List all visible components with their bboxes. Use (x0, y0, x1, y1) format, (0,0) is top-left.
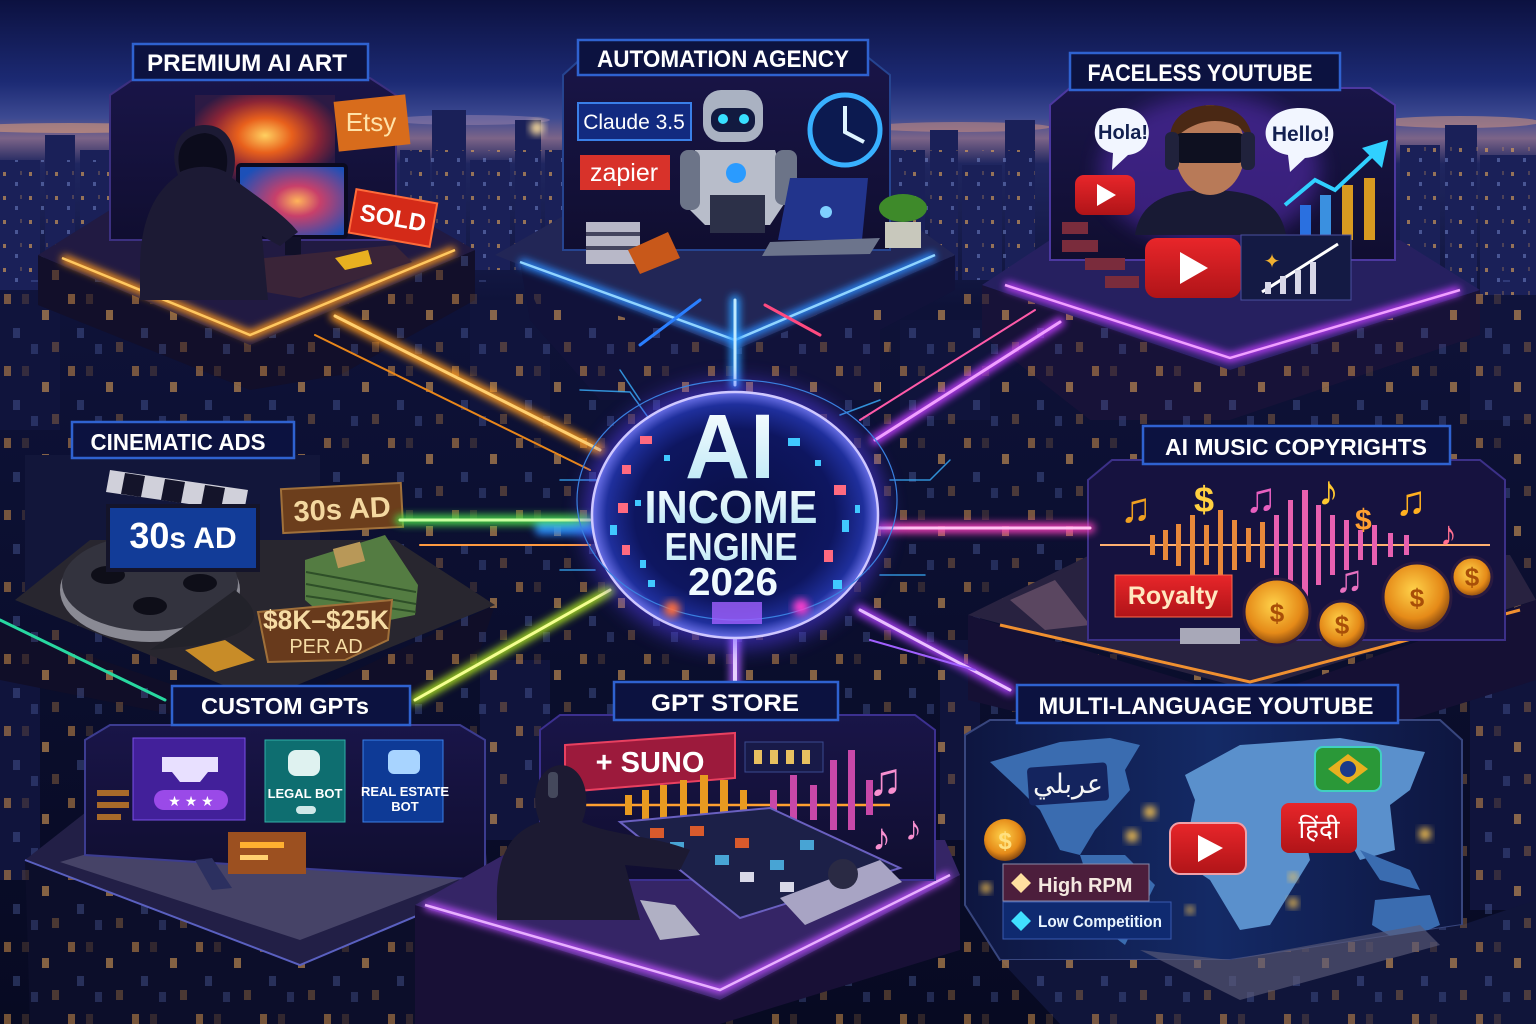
icon: money stacks (305, 535, 418, 630)
icon: music notes and dollar signs: ♪ (1440, 515, 1457, 553)
tag: Claude 3.5 (578, 103, 691, 140)
tag: High RPM: High RPM (1038, 875, 1132, 897)
speech bubble: Hello! (1266, 108, 1333, 172)
central sphere: AI Income Engine 2026: AI (685, 396, 775, 498)
icon: laptop (762, 178, 880, 256)
icon: tablet (195, 858, 232, 890)
speech bubble: Hola! (1095, 108, 1149, 170)
heading: CINEMATIC ADS (90, 429, 266, 455)
tag: 30s AD: 30s AD (293, 491, 392, 529)
tag: $8K-$25K per ad: $8K–$25K (263, 605, 389, 635)
tag: SOLD: SOLD (358, 199, 428, 238)
waveform (560, 750, 890, 830)
stats card (1241, 235, 1351, 300)
heading: PREMIUM AI ART (147, 50, 347, 77)
panel: Multi-Language YouTube (965, 685, 1536, 1024)
card: Real Estate Bot (361, 740, 449, 822)
speech bubble: Hola!: Hola! (1098, 122, 1148, 144)
tag: Royalty: Royalty (1128, 582, 1218, 610)
panel: Automation Agency (495, 40, 955, 400)
tag: 30s AD (281, 483, 403, 533)
tag: Etsy: Etsy (346, 107, 396, 137)
icon: Brazil flag (1315, 747, 1381, 791)
back wall (1050, 88, 1395, 260)
monitor (238, 165, 346, 255)
icon: music notes: ♫ (868, 753, 902, 805)
tag: Low Competition: Low Competition (1038, 913, 1162, 931)
heading: GPT STORE (651, 690, 799, 717)
heading (72, 422, 294, 458)
icon: gold coins: $ (1410, 583, 1425, 613)
tag: zapier: zapier (590, 159, 658, 187)
panel: GPT Store (415, 682, 960, 1024)
tag: High RPM (1003, 864, 1149, 901)
icon: music notes and dollar signs: ♫ (1395, 477, 1426, 524)
heading: FACELESS YOUTUBE (1088, 60, 1312, 87)
map: world continents (990, 738, 1440, 945)
heading: CUSTOM GPTs (201, 693, 369, 719)
icon: plant (879, 194, 927, 248)
heading: AUTOMATION AGENCY (597, 46, 849, 73)
icon: music notes and dollar signs (1120, 467, 1457, 601)
tag: Arabic: عربلي (1033, 769, 1103, 800)
mixing console (620, 808, 900, 918)
back wall (540, 715, 935, 880)
chart: rising bars with arrow (1285, 140, 1388, 240)
neon connector lines (0, 300, 1090, 700)
heading: AI MUSIC COPYRIGHTS (1165, 434, 1427, 460)
central sphere: AI Income Engine 2026: INCOME (644, 481, 818, 533)
platform (415, 840, 960, 1024)
back wall (110, 78, 396, 240)
central sphere: AI Income Engine 2026: ENGINE (664, 526, 798, 569)
icon: gold coins (1244, 557, 1492, 649)
tag: Arabic (1027, 762, 1109, 806)
sparkles (981, 806, 1431, 914)
heading (614, 682, 838, 720)
icon: music notes and dollar signs: ♫ (1120, 484, 1152, 531)
icon: music notes and dollar signs: $ (1194, 479, 1214, 520)
heading (1143, 426, 1450, 464)
tag: SOLD (349, 189, 437, 247)
tag: $8K-$25K per ad (258, 600, 392, 662)
heading (172, 686, 410, 725)
icon: music notes and dollar signs: ♫ (1245, 474, 1276, 521)
desk (225, 245, 412, 298)
icon: clock (810, 95, 880, 165)
platform (495, 215, 955, 400)
card: purple bot (133, 738, 245, 820)
card: purple bot: ★ ★ ★ (168, 793, 214, 809)
heading: MULTI-LANGUAGE YOUTUBE (1038, 693, 1374, 720)
tag: Suno (565, 733, 735, 792)
tag: Hindi (1281, 803, 1357, 853)
tag: Claude 3.5: Claude 3.5 (583, 111, 685, 134)
tag: Royalty (1115, 575, 1232, 617)
central sphere: AI Income Engine 2026 (577, 380, 897, 649)
icon: music notes and dollar signs: ♪ (1318, 467, 1339, 514)
tag: Suno: + SUNO (596, 747, 704, 779)
platform (25, 805, 490, 1024)
icon: music notes and dollar signs: $ (1355, 504, 1372, 537)
panel: Faceless YouTube (982, 53, 1480, 420)
card: Legal Bot (265, 740, 345, 822)
icon: clapperboard screen (106, 470, 258, 570)
icon: stacked documents (586, 222, 680, 274)
tag: Hindi: हिंदी (1298, 814, 1341, 844)
icon: music notes and dollar signs: ♫ (1335, 559, 1364, 601)
icon: brick stack (1062, 222, 1139, 288)
icon: large play button (1145, 238, 1241, 298)
icon: person at console (497, 765, 690, 920)
panel: AI Music Copyrights (968, 426, 1536, 770)
speech bubble: Hello!: Hello! (1272, 123, 1330, 146)
tag: zapier (580, 155, 670, 190)
tag: Etsy (334, 94, 410, 152)
tag: Low Competition (1003, 902, 1171, 939)
equaliser chip (745, 742, 823, 772)
icon: keys (1180, 628, 1240, 644)
speaker (780, 859, 902, 925)
central sphere: AI Income Engine 2026: 2026 (688, 561, 778, 604)
heading (1017, 685, 1398, 723)
artwork (195, 95, 335, 185)
back wall (1088, 460, 1505, 640)
tag: $8K-$25K per ad: PER AD (289, 636, 363, 658)
heading (1070, 53, 1340, 90)
panel: Custom GPTs (25, 686, 490, 1024)
heading (133, 44, 368, 80)
back wall (85, 725, 485, 880)
icon: robot (680, 90, 797, 233)
panel: Cinematic Ads (0, 422, 495, 740)
notes (97, 790, 129, 820)
icon: gold coins: $ (1465, 562, 1480, 592)
back wall with map (965, 720, 1462, 960)
icon: coin (984, 819, 1026, 861)
icon: film reel (60, 535, 254, 650)
card: Real Estate Bot: REAL ESTATE (361, 784, 449, 799)
icon: gold coins: $ (1335, 610, 1350, 640)
stats card: ✦ (1264, 251, 1280, 273)
icon: small play button (1075, 175, 1135, 215)
icon: music notes: ♪ (905, 810, 922, 848)
icon: gold coins: $ (1270, 598, 1285, 628)
card: Real Estate Bot: BOT (391, 799, 419, 814)
icon: play button (1170, 823, 1246, 874)
icon: coin: $ (998, 828, 1012, 855)
panel: Premium AI Art (38, 44, 475, 390)
platform (38, 205, 475, 390)
icon: orange box (228, 832, 306, 874)
back wall (563, 55, 890, 250)
platform (1000, 900, 1536, 1024)
icon: hooded artist (140, 125, 298, 300)
card: Legal Bot: LEGAL BOT (268, 786, 342, 801)
icon: presenter with visor and headphones (1135, 105, 1286, 235)
icon: music notes: ♪ (872, 817, 891, 859)
platform (982, 240, 1480, 420)
tablet (640, 900, 700, 940)
icon: clapperboard screen: 30s AD (129, 515, 237, 556)
platform (0, 455, 495, 740)
icon: music notes (868, 753, 922, 859)
platform (968, 555, 1536, 770)
waveform (1100, 490, 1500, 600)
